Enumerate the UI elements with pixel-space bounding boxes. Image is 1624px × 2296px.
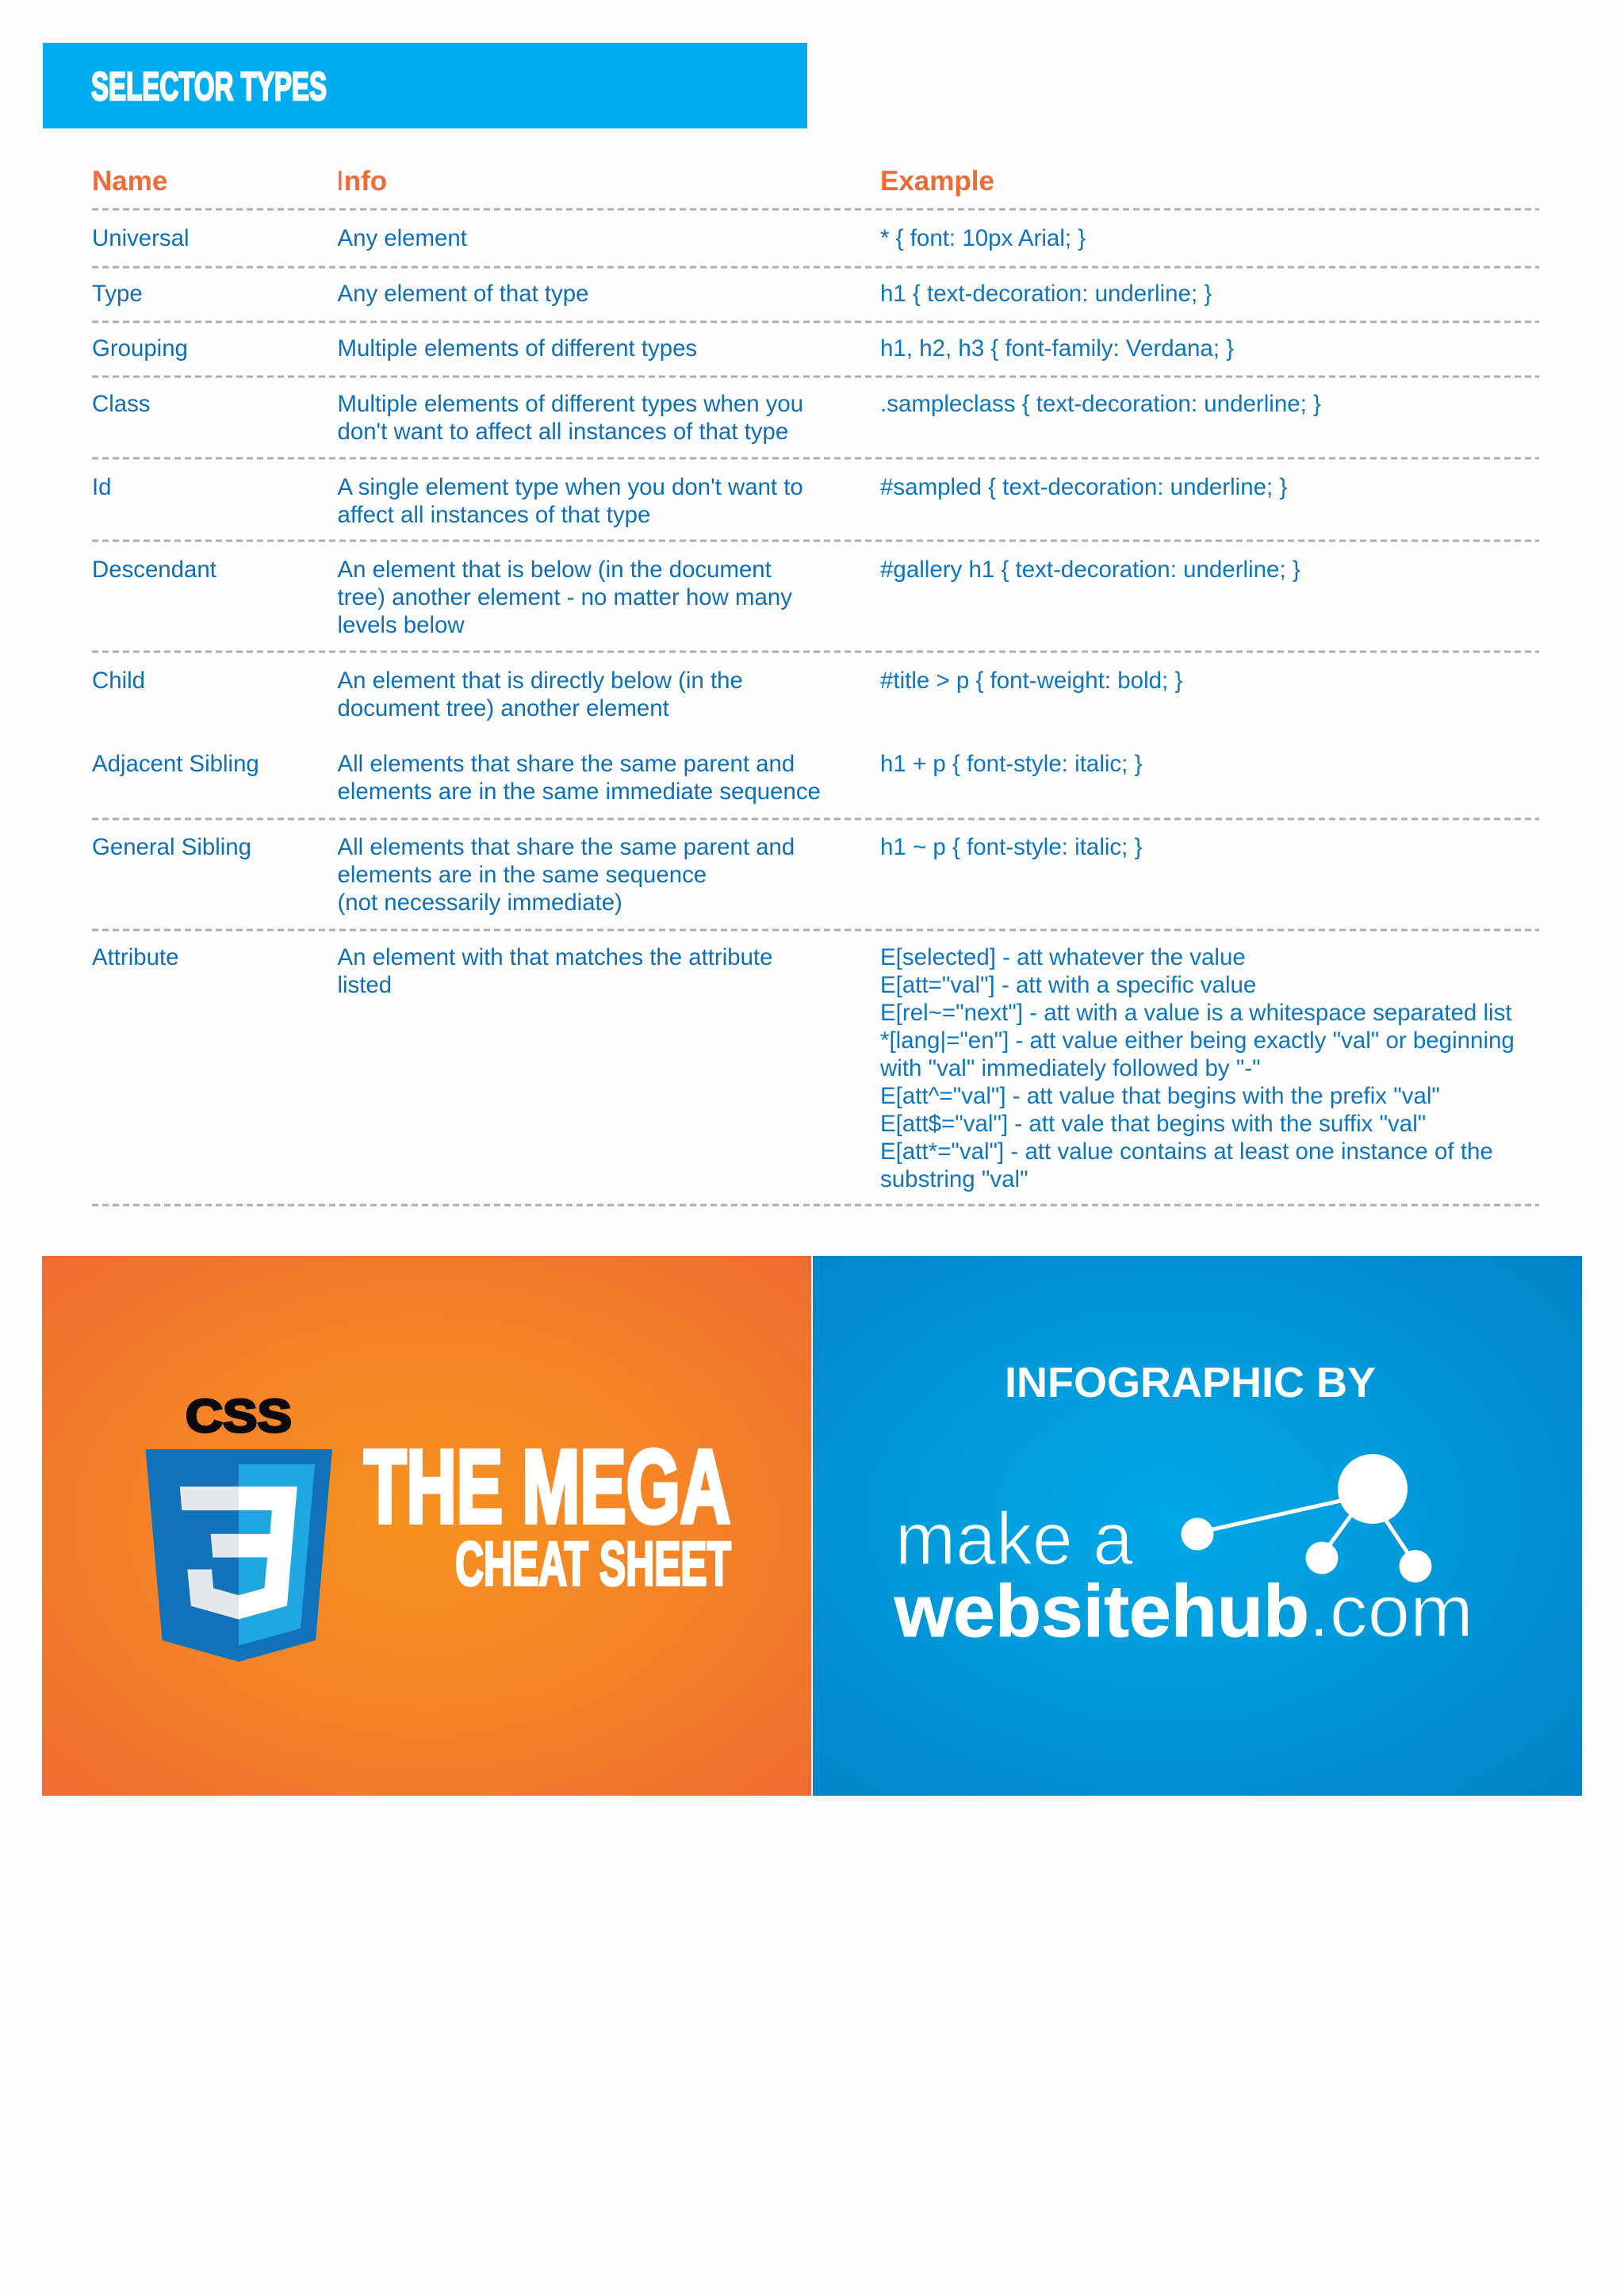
info: elements are in the same sequence <box>338 862 707 888</box>
logo text: websitehub.com <box>894 1570 1473 1652</box>
css wordmark: CSS <box>186 1391 292 1442</box>
name: Adjacent Sibling <box>92 751 259 777</box>
example: *[lang|="en"] - att value either being exactly "val" or beginning <box>880 1027 1515 1054</box>
info <box>338 668 743 721</box>
row: grouping <box>92 335 1234 362</box>
example: * { font: 10px Arial; } <box>880 225 1086 251</box>
panel: css3 cheat sheet title <box>42 1256 811 1796</box>
info: An element that is below (in the document <box>338 557 772 583</box>
info: tree) another element - no matter how many <box>338 584 792 610</box>
example: h1 { text-decoration: underline; } <box>880 281 1212 307</box>
name: Grouping <box>92 335 188 362</box>
info: Any element <box>338 225 467 251</box>
name: Universal <box>92 225 189 251</box>
info <box>338 557 792 638</box>
info: Any element of that type <box>338 281 588 307</box>
example: h1, h2, h3 { font-family: Verdana; } <box>880 335 1234 362</box>
row: class <box>92 391 1321 445</box>
panel: infographic credit <box>813 1256 1582 1796</box>
example: E[att="val"] - att with a specific value <box>880 972 1256 998</box>
column heading: example: Example <box>880 166 994 197</box>
section header: selector types <box>43 43 807 128</box>
info: All elements that share the same parent and <box>338 751 795 777</box>
info: An element with that matches the attribute <box>338 944 772 970</box>
example: #gallery h1 { text-decoration: underline; } <box>880 557 1300 583</box>
icon: network nodes <box>1182 1454 1432 1582</box>
column heading: name: Name <box>92 166 167 197</box>
column heading: info: Info <box>336 166 387 197</box>
info: don't want to affect all instances of that type <box>338 419 788 445</box>
info: elements are in the same immediate sequence <box>338 779 821 805</box>
example: E[att^="val"] - att value that begins with the prefix "val" <box>880 1083 1440 1109</box>
row: child <box>92 668 1182 721</box>
table column headings <box>92 166 994 197</box>
example: h1 + p { font-style: italic; } <box>880 751 1142 777</box>
name: Child <box>92 668 145 694</box>
name: Type <box>92 281 143 307</box>
logo text: websitehub.com: websitehub <box>894 1570 1309 1652</box>
logo text: websitehub.com: .com <box>1308 1570 1473 1652</box>
name: Class <box>92 391 151 417</box>
example: substring "val" <box>880 1166 1028 1192</box>
example: #sampled { text-decoration: underline; } <box>880 474 1287 500</box>
heading: infographic by: INFOGRAPHIC BY <box>1005 1359 1376 1406</box>
info: Multiple elements of different types <box>338 335 697 362</box>
name: General Sibling <box>92 834 251 860</box>
name: Attribute <box>92 944 178 970</box>
row: universal <box>92 225 1086 251</box>
name: Descendant <box>92 557 216 583</box>
info: A single element type when you don't want to <box>338 474 803 500</box>
heading text: SELECTOR TYPES <box>91 64 327 109</box>
row: id <box>92 474 1287 528</box>
info: levels below <box>338 612 465 638</box>
row: adjacent sibling <box>92 751 1142 805</box>
row: general sibling <box>92 834 1142 916</box>
example: E[selected] - att whatever the value <box>880 944 1246 970</box>
info: document tree) another element <box>338 695 669 721</box>
info: All elements that share the same parent and <box>338 834 795 860</box>
info <box>338 834 795 916</box>
example: E[att*="val"] - att value contains at least one instance of the <box>880 1138 1493 1165</box>
example: with "val" immediately followed by "-" <box>880 1055 1261 1081</box>
example: E[rel~="next"] - att with a value is a whitespace separated list <box>880 1000 1512 1026</box>
info: (not necessarily immediate) <box>338 890 622 916</box>
example: h1 ~ p { font-style: italic; } <box>880 834 1142 860</box>
row: attribute <box>92 944 1515 1192</box>
row: descendant <box>92 557 1300 638</box>
example: .sampleclass { text-decoration: underline; } <box>880 391 1321 417</box>
example: #title > p { font-weight: bold; } <box>880 668 1182 694</box>
info: listed <box>338 972 392 998</box>
info: Multiple elements of different types when you <box>338 391 803 417</box>
row: type <box>92 281 1212 307</box>
icon: css3 shield <box>146 1449 332 1662</box>
info <box>338 474 803 528</box>
logo text: make a: make a <box>895 1497 1134 1580</box>
example: E[att$="val"] - att vale that begins with the suffix "val" <box>880 1111 1426 1137</box>
name: Id <box>92 474 112 500</box>
info: affect all instances of that type <box>338 502 650 528</box>
info <box>338 944 772 998</box>
info <box>338 751 821 805</box>
example <box>880 944 1515 1192</box>
info: An element that is directly below (in the <box>338 668 743 694</box>
info <box>338 391 803 445</box>
